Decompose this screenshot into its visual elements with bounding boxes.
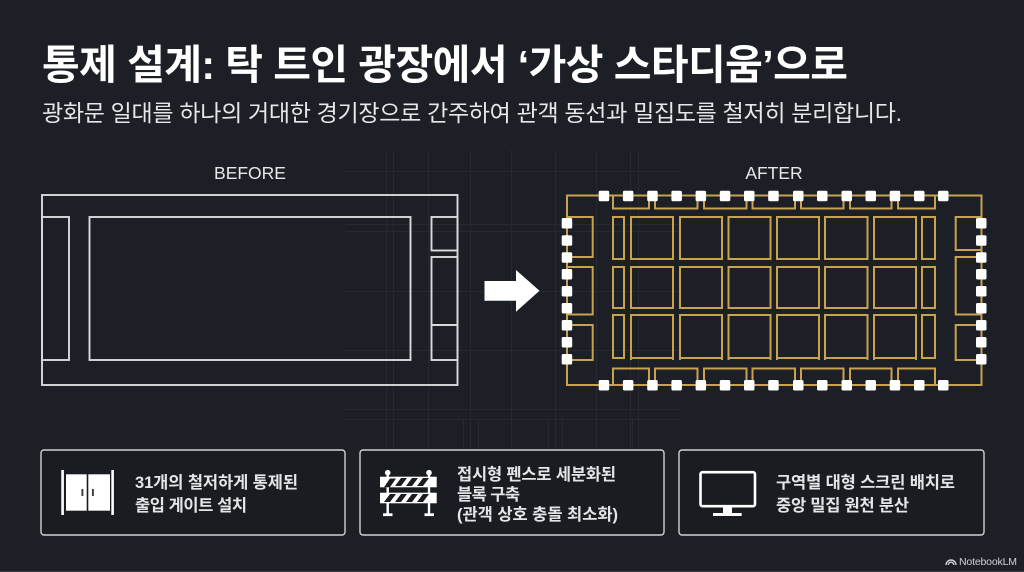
icon: barricade bbox=[380, 470, 437, 516]
text: gates: 31개의 철저하게 통제된 bbox=[135, 473, 298, 492]
gold fence lines bbox=[567, 196, 982, 385]
icon: notebook logo bbox=[946, 560, 956, 565]
diagram: before plan bbox=[42, 195, 458, 385]
central plaza bbox=[90, 217, 410, 360]
right block: top bbox=[432, 217, 458, 250]
gates: right column bbox=[976, 218, 986, 364]
label: after: AFTER bbox=[745, 163, 803, 183]
title: 통제 설계: 탁 트인 광장에서 ‘가상 스타디움’으로 bbox=[42, 42, 848, 88]
gates: top row bbox=[599, 191, 948, 201]
card frame bbox=[41, 450, 345, 535]
outer boundary bbox=[42, 195, 458, 385]
gates: bottom row bbox=[599, 380, 948, 390]
label: before: BEFORE bbox=[214, 163, 286, 183]
text: screens bbox=[776, 473, 955, 515]
arrow bbox=[484, 270, 540, 312]
watermark bbox=[946, 556, 1017, 568]
right block divider bbox=[432, 324, 458, 326]
watermark text: NotebookLM bbox=[959, 556, 1017, 568]
panel: screens bbox=[679, 450, 984, 535]
left block bbox=[42, 217, 69, 360]
diagram: after plan bbox=[562, 191, 986, 390]
text: fences: 접시형 펜스로 세분화된 bbox=[457, 465, 616, 484]
gates: left column bbox=[562, 218, 572, 364]
icon: monitor bbox=[700, 472, 755, 516]
text: gates bbox=[135, 473, 298, 515]
text: fences: (관객 상호 충돌 최소화) bbox=[457, 505, 618, 524]
text: fences bbox=[457, 465, 618, 524]
right block: bottom bbox=[432, 257, 458, 360]
icon: double door bbox=[61, 470, 114, 515]
text: gates: 출입 게이트 설치 bbox=[135, 496, 247, 515]
panel: fences bbox=[360, 450, 664, 535]
card frame bbox=[360, 450, 664, 535]
text: screens: 중앙 밀집 원천 분산 bbox=[776, 496, 909, 515]
card frame bbox=[679, 450, 984, 535]
panel: gates bbox=[41, 450, 345, 535]
subtitle: 광화문 일대를 하나의 거대한 경기장으로 간주하여 관객 동선과 밀집도를 철저히 분리합니다. bbox=[42, 100, 902, 126]
text: screens: 구역별 대형 스크린 배치로 bbox=[776, 473, 955, 492]
text: fences: 블록 구축 bbox=[457, 485, 520, 504]
